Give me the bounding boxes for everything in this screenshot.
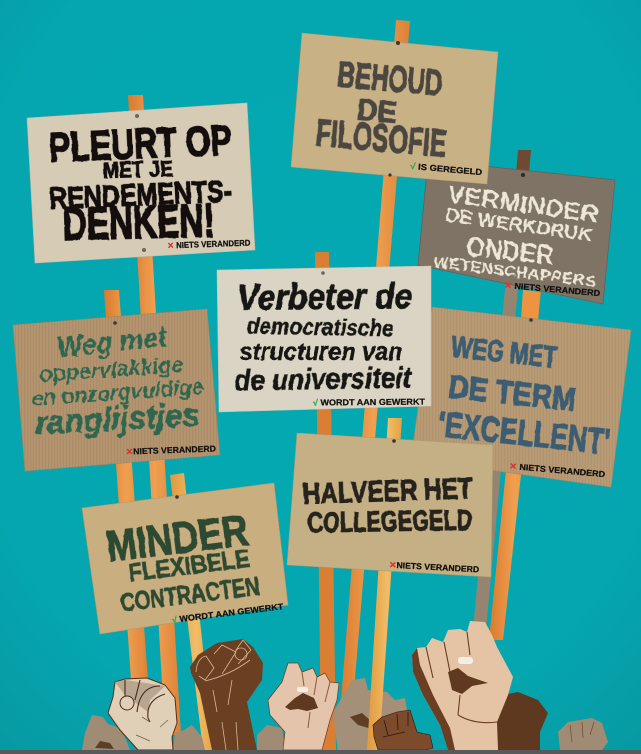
sign: Verbeter de democratische structuren: Verbeter de <box>237 275 413 318</box>
sign: Verminder de werkdruk onder wetenschappers: WETENSCHAPPERS <box>432 254 597 291</box>
pole: yellow <box>367 418 402 750</box>
sign: Verminder de werkdruk onder wetenschappers <box>418 160 615 304</box>
sign: Verminder de werkdruk onder wetenschappers: ONDER <box>465 232 555 271</box>
sign: Behoud de filosofie: FILOSOFIE <box>314 112 448 166</box>
blotch on tan fist <box>350 713 372 729</box>
sign: Weg met oppervlakkige ranglijstjes <box>13 309 220 471</box>
status: is geregeld: √ IS GEREGELD <box>410 161 483 177</box>
status: wordt aan gewerkt: √ WORDT AAN GEWERKT <box>313 397 426 407</box>
sign: Halveer het collegegeld <box>287 433 493 577</box>
sign: Minder flexibele contracten: CONTRACTEN <box>119 571 261 617</box>
sign: Behoud de filosofie <box>291 33 498 184</box>
sign: Halveer het collegegeld: HALVEER HET <box>302 472 473 511</box>
sign: Verminder de werkdruk onder wetenschappers: DE WERKDRUK <box>444 205 594 245</box>
status: wordt aan gewerkt: √ WORDT AAN GEWERKT <box>171 601 285 625</box>
sign: Verbeter de democratische structuren <box>217 266 431 412</box>
sign: Verbeter de democratische structuren: democratische <box>246 313 394 341</box>
sign: Weg met oppervlakkige ranglijstjes: en onzorgvuldige <box>31 374 204 411</box>
sign: Weg met oppervlakkige ranglijstjes: Weg met <box>56 320 170 365</box>
sign: Verbeter de democratische structuren: structuren van <box>240 338 402 366</box>
sign: Weg met oppervlakkige ranglijstjes: ranglijstjes <box>34 396 201 441</box>
status: niets veranderd: ✕NIETS VERANDERD <box>126 443 216 457</box>
fist: small tan far left <box>82 715 130 750</box>
poles <box>104 20 541 750</box>
sign: Minder flexibele contracten: FLEXIBELE <box>127 545 251 587</box>
sign: Minder flexibele contracten: MINDER <box>104 506 251 572</box>
sign: Pleurt op met je rendementsdenken: MET JE <box>102 156 173 183</box>
sign: Weg met de term excellent: WEG MET <box>450 331 558 375</box>
sign: Pleurt op met je rendementsdenken: RENDEMENTS- <box>48 173 233 216</box>
fist: light centre <box>268 663 339 750</box>
fist: light hatched <box>108 678 177 750</box>
pole front of sign 3 <box>521 290 540 322</box>
fist: small tan behind centre <box>257 725 285 750</box>
fist: dark brown <box>190 639 263 750</box>
status: niets veranderd: ✕ NIETS VERANDERD <box>504 280 601 298</box>
sign: Pleurt op met je rendementsdenken: DENKEN! <box>62 194 215 250</box>
sign: Behoud de filosofie: DE <box>355 93 398 130</box>
fist: small tan between <box>173 725 205 750</box>
fists <box>82 621 608 750</box>
sign: Pleurt op met je rendementsdenken <box>27 103 255 263</box>
sign: Weg met de term excellent <box>411 307 631 487</box>
sign: Behoud de filosofie: BEHOUD <box>336 54 444 104</box>
sign: Minder flexibele contracten <box>82 483 288 634</box>
fist: large light <box>412 621 513 750</box>
fist: tan centre-right <box>333 678 407 750</box>
sign: Pleurt op met je rendementsdenken: PLEURT OP <box>48 116 233 171</box>
sign: Weg met oppervlakkige ranglijstjes: oppervlakkige <box>39 352 184 387</box>
fist: brown small centre-right <box>373 710 433 750</box>
fists behind the yellow pole <box>333 678 407 750</box>
sign: Halveer het collegegeld: COLLEGEGELD <box>307 505 473 539</box>
fist: small tan far right <box>558 718 608 750</box>
sign: Weg met de term excellent: DE TERM <box>447 368 578 418</box>
fist: dark behind large <box>497 692 548 750</box>
sign: Verminder de werkdruk onder wetenschappers: VERMINDER <box>446 181 600 229</box>
status: niets veranderd: ✕ NIETS VERANDERD <box>509 461 606 479</box>
sign: Verbeter de democratische structuren: de universiteit <box>234 361 413 398</box>
status: niets veranderd: ✕ NIETS VERANDERD <box>167 238 251 250</box>
status: niets veranderd: ✕NIETS VERANDERD <box>389 560 479 574</box>
bottom grey bar <box>0 750 641 754</box>
